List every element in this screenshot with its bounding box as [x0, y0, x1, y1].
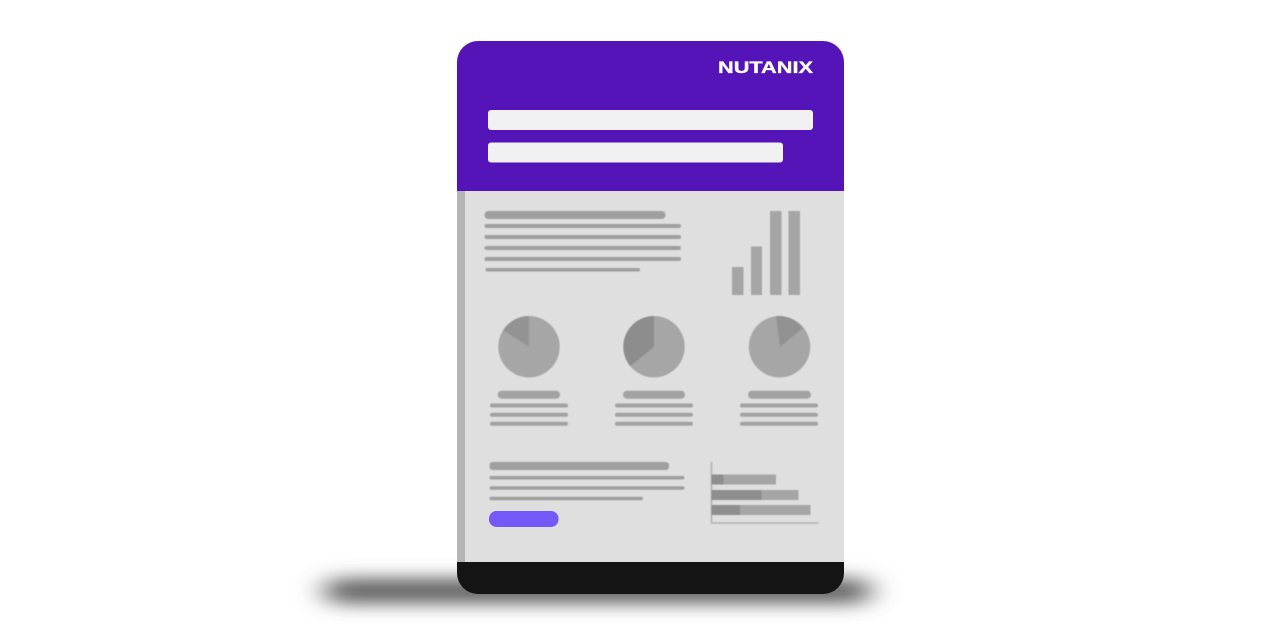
bar chart: [732, 211, 800, 295]
document body: [457, 191, 844, 562]
call to action button: [489, 511, 558, 527]
pie chart 2: [623, 316, 685, 377]
intro text block: [484, 211, 681, 272]
black footer: [457, 562, 844, 594]
pie chart 3: [749, 316, 810, 377]
drop shadow: [325, 579, 870, 603]
left edge strip: [457, 191, 465, 562]
pie caption 3: [740, 391, 818, 426]
pie caption 2: [615, 391, 693, 426]
logo: NUTANIX: [718, 59, 813, 77]
lower text block: [490, 462, 684, 500]
infographic: report document illustration: [304, 41, 890, 618]
header title bars: [488, 110, 813, 162]
pie chart 1: [498, 316, 560, 377]
pie caption 1: [490, 391, 568, 426]
horizontal bar chart: [710, 462, 818, 524]
document card: [457, 41, 844, 594]
purple header: [457, 41, 844, 191]
